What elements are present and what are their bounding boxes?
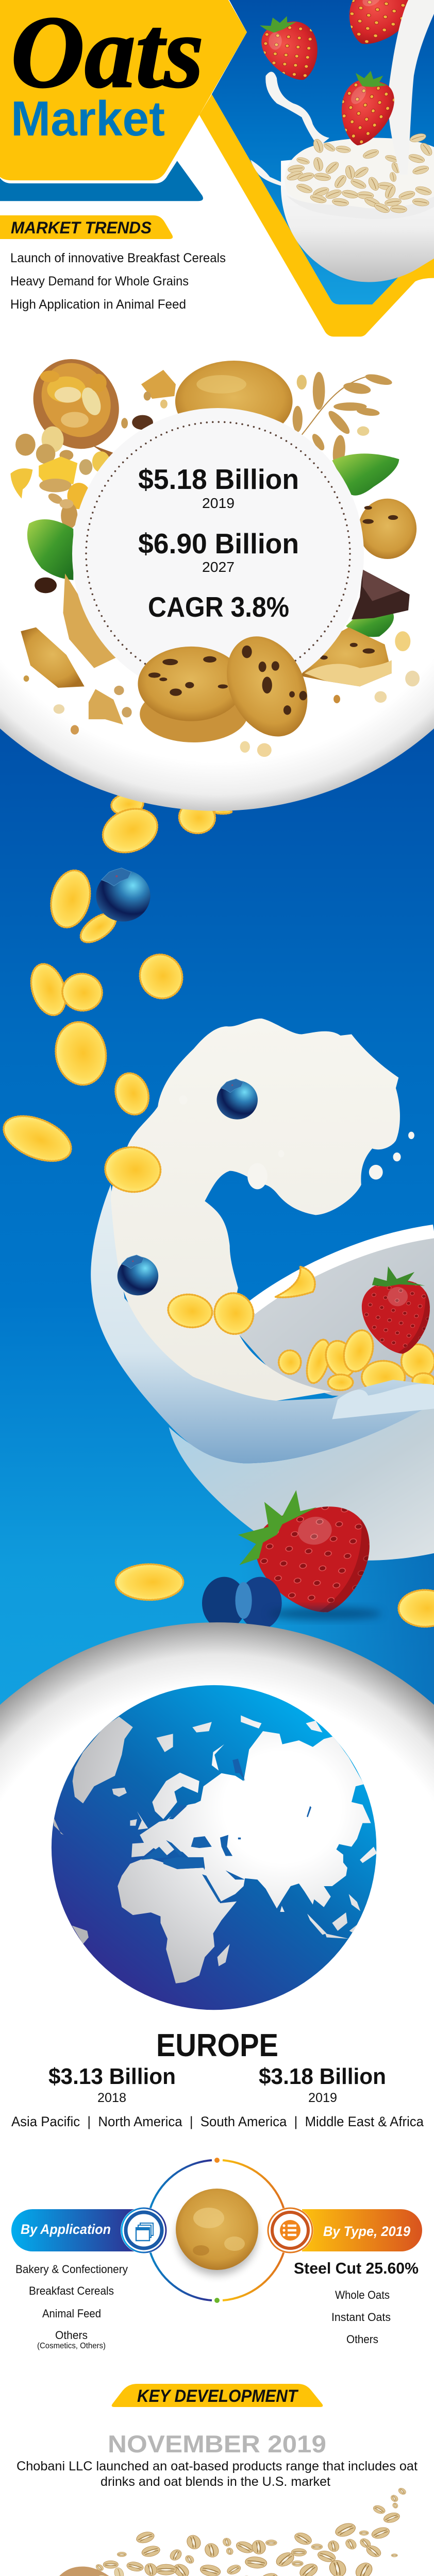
application list: Breakfast Cereals <box>29 2284 114 2297</box>
value 2018: 2018 <box>97 2091 126 2105</box>
milk splash <box>111 1019 400 1401</box>
heading: key development <box>112 2384 323 2407</box>
type list: Whole Oats <box>335 2289 390 2301</box>
cookie stack foreground <box>138 625 322 748</box>
strawberry two <box>335 0 423 54</box>
milk stream <box>388 0 434 175</box>
blue background <box>0 721 434 1716</box>
milk splash left <box>251 72 329 186</box>
pill: by application: By Application <box>21 2222 111 2237</box>
panel: regional dome <box>0 1622 434 2129</box>
heading: market trends: MARKET TRENDS <box>11 218 152 237</box>
loose flakes left <box>10 370 176 529</box>
strawberry three <box>332 67 402 150</box>
cookie and ingredient illustration back <box>10 346 420 757</box>
oats in bowl <box>49 2567 167 2576</box>
value 2019: $3.18 Billion <box>259 2064 386 2089</box>
panel: key development <box>16 2384 418 2576</box>
type list: Instant Oats <box>331 2311 391 2324</box>
type list <box>294 2259 419 2346</box>
date: November 2019: NOVEMBER 2019 <box>108 2430 326 2458</box>
other regions: Asia Pacific | North America | South America | Middle East & Africa <box>11 2114 424 2129</box>
strawberry leaves <box>238 1490 317 1565</box>
type list: Steel Cut 25.60% <box>294 2259 419 2277</box>
milk droplets <box>179 1095 414 1189</box>
trends list: High Application in Animal Feed <box>10 297 186 312</box>
wooden spoon <box>18 346 134 471</box>
CAGR: CAGR 3.8% <box>148 591 289 623</box>
cereal bowl <box>281 132 434 282</box>
panel: hero header <box>0 0 434 336</box>
bowl with milk <box>91 1185 434 1561</box>
application list <box>15 2263 128 2350</box>
bottom flakes <box>115 1564 434 1627</box>
white dome bottom edge <box>0 361 434 811</box>
pill: by application <box>11 2209 135 2251</box>
ring arcs <box>150 2158 284 2303</box>
strawberry in bowl <box>356 1262 434 1358</box>
strawberry shadow <box>268 1607 381 1620</box>
blue hero background <box>212 0 434 304</box>
flakes on milk <box>103 1145 315 1337</box>
blueberry upper <box>96 868 151 922</box>
green leaves <box>27 453 399 637</box>
heading: market trends <box>0 215 173 239</box>
application list: Animal Feed <box>42 2307 101 2320</box>
chocolate <box>352 569 410 619</box>
trends list <box>10 251 226 312</box>
application list: Others <box>55 2329 88 2342</box>
value 2019: 2019 <box>308 2091 337 2105</box>
oats flying out <box>94 2487 407 2576</box>
trends list: Launch of innovative Breakfast Cereals <box>10 251 226 265</box>
value 2019 <box>138 463 299 511</box>
trends list: Heavy Demand for Whole Grains <box>10 274 189 289</box>
blue ribbon under title <box>0 161 203 201</box>
value 2027 <box>138 528 299 575</box>
development text one: drinks and oat blends in the U.S. market <box>101 2475 330 2489</box>
cookie centre <box>176 2189 258 2275</box>
value 2019 <box>259 2064 386 2105</box>
yellow chevron band <box>199 94 434 336</box>
falling corn flakes <box>0 792 231 1170</box>
value 2027: 2027 <box>202 559 235 575</box>
value 2027: $6.90 Billion <box>138 528 299 560</box>
yellow title hexagon <box>0 0 247 180</box>
wooden bowl of oats <box>28 2560 167 2576</box>
icon: by application <box>121 2207 167 2253</box>
value 2019: $5.18 Billion <box>138 463 299 495</box>
white dome <box>0 1622 434 2014</box>
cookies right and left <box>21 499 420 757</box>
panel: segmentation <box>11 2158 422 2350</box>
oat flakes in bowl <box>286 132 434 214</box>
heading: Europe: EUROPE <box>156 2028 278 2063</box>
white value circle <box>72 408 364 700</box>
panel: market size dome <box>0 346 434 811</box>
pill: by type: By Type, 2019 <box>323 2224 410 2239</box>
oat sprig <box>293 372 393 468</box>
type list: Others <box>346 2333 378 2346</box>
development text one <box>16 2459 418 2489</box>
large strawberry <box>248 1499 383 1623</box>
application list: (Cosmetics, Others) <box>37 2342 106 2350</box>
value 2019: 2019 <box>202 495 235 511</box>
coffee bean <box>35 578 57 593</box>
development text one: Chobani LLC launched an oat-based products range that includes oat <box>16 2459 418 2473</box>
application list: Bakery & Confectionery <box>15 2263 128 2276</box>
blueberries on splash <box>118 1079 258 1295</box>
strawberry one <box>253 9 329 87</box>
value 2018: $3.13 Billion <box>48 2064 176 2089</box>
title: Market: Market <box>11 91 165 146</box>
value 2018 <box>48 2064 176 2105</box>
icon: by type <box>267 2207 313 2253</box>
heading: key development: KEY DEVELOPMENT <box>137 2386 299 2406</box>
pill: by type <box>302 2209 422 2251</box>
panel: blue milk splash section <box>0 721 434 1716</box>
bottom blueberries <box>202 1577 282 1630</box>
world globe <box>52 1685 377 2010</box>
cereal in bowl <box>279 1327 434 1394</box>
